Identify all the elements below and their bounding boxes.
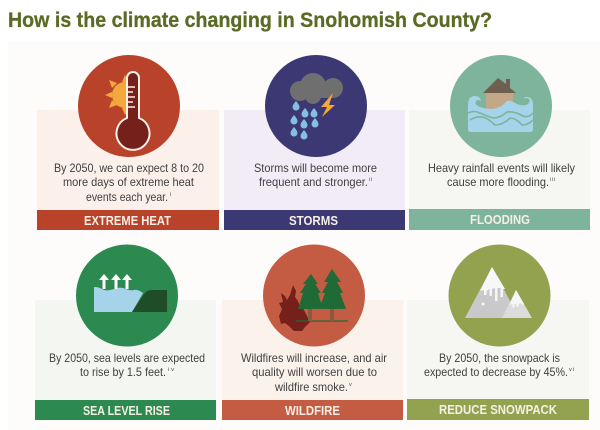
label: sea level rise <box>35 400 216 420</box>
text: sea level rise <box>49 351 205 379</box>
text: reduce snowpack <box>424 351 574 379</box>
panel: sea level rise <box>35 244 216 420</box>
text: sea level rise: to rise by 1.5 feet. <box>80 365 166 379</box>
panel: extreme heat <box>37 55 219 230</box>
label: reduce snowpack <box>407 399 589 420</box>
text: storms: Storms will become more <box>254 161 377 175</box>
text: extreme heat: By 2050, we can expect 8 to 20 <box>54 161 204 175</box>
text: extreme heat: more days of extreme heat <box>63 175 195 189</box>
text: wildfire: wildfire smoke. <box>274 380 348 394</box>
title: How is the climate changing in Snohomish County? <box>8 9 492 32</box>
icon: rising sea <box>76 244 178 346</box>
label: flooding: FLOODING <box>470 212 530 227</box>
label: sea level rise: SEA LEVEL RISE <box>83 403 170 418</box>
text: reduce snowpack: expected to decrease by 45%. <box>424 365 568 379</box>
icon: flooded house <box>450 55 552 157</box>
label: reduce snowpack: REDUCE SNOWPACK <box>439 402 558 417</box>
text: reduce snowpack: vi <box>569 367 574 373</box>
panel: storms <box>224 55 405 230</box>
icon: snowy mountains <box>448 244 550 346</box>
panel: flooding <box>409 55 590 230</box>
text: flooding: iii <box>550 177 555 183</box>
text: storms: frequent and stronger. <box>259 175 368 189</box>
text: flooding: cause more flooding. <box>447 175 549 189</box>
panel: reduce snowpack <box>407 244 589 420</box>
text: storms: ii <box>369 177 372 183</box>
label: wildfire: WILDFIRE <box>285 403 340 418</box>
label: extreme heat <box>37 210 219 230</box>
label: storms: STORMS <box>289 213 338 228</box>
panel: wildfire <box>222 244 403 420</box>
icon: fire and trees <box>263 244 365 346</box>
text: wildfire <box>241 351 387 394</box>
text: flooding: Heavy rainfall events will likely <box>428 161 575 175</box>
text: wildfire: v <box>349 382 352 388</box>
text: reduce snowpack: By 2050, the snowpack is <box>439 351 560 365</box>
label: storms <box>224 210 405 230</box>
icon: thermometer and sun <box>78 55 180 157</box>
label: flooding <box>409 209 590 230</box>
label: extreme heat: EXTREME HEAT <box>84 213 171 228</box>
text: sea level rise: iv <box>168 367 174 373</box>
text: flooding <box>428 161 575 189</box>
label: wildfire <box>222 400 403 420</box>
text: extreme heat <box>54 161 204 204</box>
text: extreme heat: i <box>170 192 171 198</box>
text: wildfire: quality will worsen due to <box>252 365 377 379</box>
text: extreme heat: events each year. <box>86 190 168 204</box>
icon: storm cloud <box>265 55 367 157</box>
text: wildfire: Wildfires will increase, and air <box>241 351 387 365</box>
text: storms <box>254 161 377 189</box>
text: sea level rise: By 2050, sea levels are expected <box>49 351 205 365</box>
